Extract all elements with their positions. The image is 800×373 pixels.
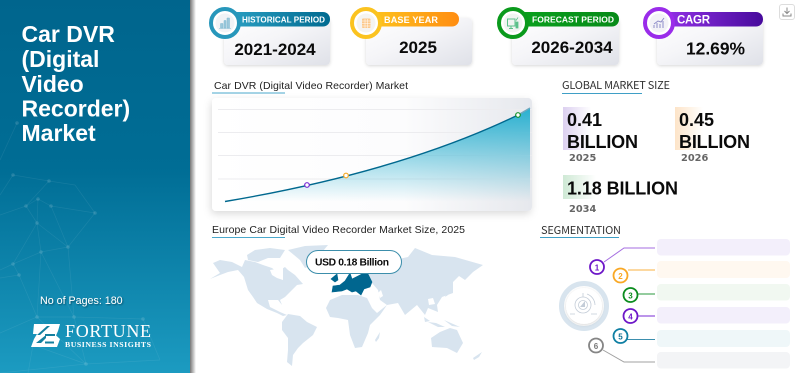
segment 5 [614, 329, 790, 347]
stat: 2026 market size: 2026 [681, 153, 708, 164]
panel: forecast period: FORECAST PERIOD [532, 14, 614, 24]
page count: No of Pages: 180 [40, 295, 123, 307]
world map [210, 245, 483, 366]
stat: 2025 market size: 2025 [569, 153, 596, 164]
panel: historical period [211, 9, 330, 65]
data point: 2026 [344, 173, 348, 178]
icon: download button [780, 4, 794, 20]
segment 4: 4 [628, 312, 633, 322]
logo: Fortune Business Insights: FORTUNE [65, 321, 151, 341]
heading: market chart: Car DVR (Digital Video Recorder) Market [214, 80, 408, 92]
header pill [364, 12, 459, 26]
header pill [511, 12, 619, 26]
title: Market [22, 120, 96, 146]
map: Europe highlighted [331, 273, 372, 295]
title [22, 21, 130, 146]
segment 1 [590, 239, 790, 274]
panel: left sidebar [0, 0, 196, 373]
panel: base year: BASE YEAR [384, 15, 438, 25]
segment 3 [624, 284, 790, 302]
stat: 2025 market size: 0.41 [567, 110, 602, 130]
stat: 2034 market size: 2034 [569, 204, 596, 215]
heading: Europe market size: Europe Car Digital Video Recorder Market Size, 2025 [212, 224, 465, 236]
header pill [655, 12, 763, 26]
segment 2 [614, 261, 790, 282]
panel: forecast period [499, 9, 619, 65]
panel: CAGR [645, 9, 763, 65]
callout: Europe value: USD 0.18 Billion [315, 258, 389, 268]
callout: Europe value [306, 250, 402, 274]
icon: growth chart [645, 9, 673, 37]
segment 1: 1 [595, 264, 600, 272]
stat: 2025 market size [563, 107, 638, 164]
value: 2026-2034 [531, 38, 613, 57]
title: (Digital [22, 46, 99, 72]
area under curve [225, 108, 530, 202]
map: land masses [210, 245, 483, 366]
heading: segmentation: SEGMENTATION [541, 222, 621, 238]
logo: Fortune Business Insights [31, 321, 151, 349]
stat: 2026 market size: 0.45 [679, 110, 714, 130]
title: Video [22, 71, 84, 97]
segment 6 [589, 338, 790, 368]
heading: global market size: GLOBAL MARKET SIZE [562, 77, 670, 93]
panel: segmentation diagram [562, 239, 790, 368]
title: Car DVR [22, 21, 115, 47]
panel: CAGR: CAGR [677, 14, 711, 26]
segment hub icon [562, 284, 606, 328]
segment 3: 3 [628, 292, 633, 300]
panel: historical period: HISTORICAL PERIOD [242, 15, 325, 24]
value: 12.69% [686, 38, 745, 58]
data point: 2025 [305, 183, 309, 187]
icon: forecast screen [499, 9, 527, 37]
network pattern [0, 123, 160, 373]
stat: 2034 market size [563, 175, 678, 215]
data point: 2034 [516, 113, 520, 117]
title: Recorder) [22, 96, 130, 122]
segment 5: 5 [618, 332, 623, 342]
segment 6: 6 [594, 342, 599, 351]
stat: 2026 market size: BILLION [679, 132, 750, 152]
logo: Fortune Business Insights: BUSINESS INSIGHTS [65, 340, 151, 349]
header pill [222, 12, 330, 26]
panel: growth chart [212, 98, 532, 211]
map: bays and seas [268, 268, 435, 305]
value: 2021-2024 [234, 40, 316, 59]
segment 2: 2 [618, 272, 623, 281]
stat: 2034 market size: 1.18 BILLION [567, 178, 678, 198]
icon: bar chart [211, 9, 239, 37]
panel: base year [352, 9, 472, 65]
value: 2025 [399, 38, 437, 57]
icon: calendar [352, 9, 380, 37]
stat: 2025 market size: BILLION [567, 132, 638, 152]
stat: 2026 market size [675, 107, 750, 164]
growth curve [225, 115, 518, 202]
grid lines [218, 110, 532, 179]
segment 4 [624, 307, 790, 324]
